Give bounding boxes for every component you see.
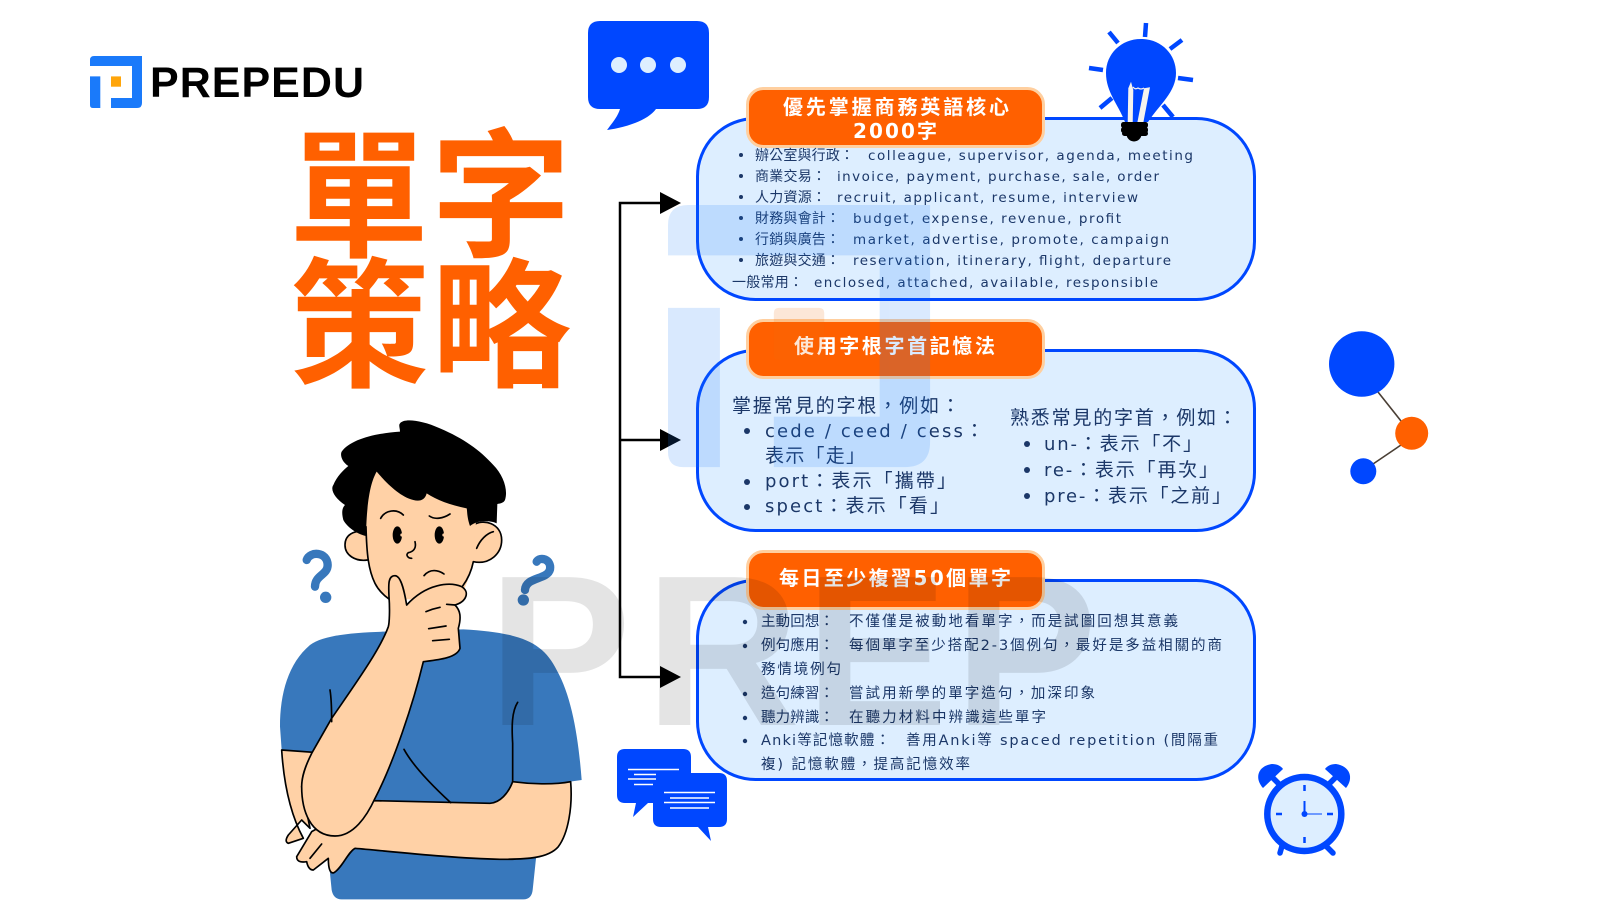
panel 3 heading — [748, 552, 1044, 608]
ears — [345, 531, 375, 560]
panel 1 list: 旅遊與交通： — [755, 250, 840, 270]
panel 3 list: 複) 記憶軟體，提高記憶效率 — [761, 756, 970, 773]
watermark: PREP: P — [488, 530, 631, 771]
panel 1 list: 辦公室與行政： — [755, 145, 854, 165]
panel 1 list — [732, 145, 1193, 292]
panel 1 list: 一般常用： — [732, 272, 803, 292]
watermark: PREP: R — [645, 530, 800, 771]
panel 1 list: 商業交易： — [755, 166, 826, 186]
panel 3 list: 善用Anki等 spaced repetition (間隔重 — [906, 731, 1218, 749]
panel 3 heading: 每日至少複習50個單字 — [779, 566, 1011, 590]
panel 3 background — [698, 580, 1254, 780]
panel 2 background — [698, 350, 1254, 530]
panel 1 list: invoice, payment, purchase, sale, order — [837, 169, 1159, 185]
title: 單字策略: 字 — [431, 85, 571, 287]
title: 單字策略: 略 — [431, 215, 571, 417]
panel 3 list — [743, 612, 1222, 773]
title: 單字策略: 策 — [289, 215, 429, 417]
panel 2: roots and prefixes — [698, 320, 1254, 530]
arrows: connector from title to panels — [620, 192, 681, 688]
logo: PREPEDU — [90, 56, 364, 108]
panel 1 list: 行銷與廣告： — [755, 229, 840, 249]
panel 1 list: 財務與會計： — [755, 208, 840, 228]
panel 2 left column: roots: 表示「走」 — [765, 445, 865, 467]
face — [366, 472, 477, 599]
title: 單字策略 — [289, 85, 571, 417]
panel 2 right column: prefixes: pre-：表示「之前」 — [1044, 485, 1231, 507]
panel 3 list: 聽力辨識： — [761, 709, 834, 726]
panel 3 list: 在聽力材料中辨識這些單字 — [849, 708, 1046, 726]
panel 2 left column: roots: spect：表示「看」 — [765, 495, 949, 517]
panel 1 list: colleague, supervisor, agenda, meeting — [868, 148, 1193, 164]
panel 2 left column: roots: 掌握常見的字根，例如： — [732, 395, 960, 417]
shirt — [280, 629, 582, 899]
question marks — [307, 554, 550, 590]
panel 3 list: Anki等記憶軟體： — [761, 731, 890, 749]
panel 3 list: 嘗試用新學的單字造句，加深印象 — [849, 684, 1095, 702]
icon: alarm clock — [1258, 764, 1350, 853]
icon: speech bubble with dots — [588, 21, 709, 130]
skin and line art — [282, 522, 571, 873]
panel 2 right column: prefixes: re-：表示「再次」 — [1044, 459, 1218, 481]
watermark: logo mark — [668, 205, 930, 467]
illustration: thinking man — [280, 420, 582, 899]
icon: chat bubbles — [617, 749, 727, 841]
panel 3 list: 造句練習： — [761, 685, 834, 702]
jaw outline — [366, 527, 473, 599]
panel 3 list: 例句應用： — [761, 636, 834, 654]
panel 2 left column: roots — [732, 395, 984, 517]
panel 2 right column: prefixes — [1010, 407, 1237, 507]
panel 3 list: 務情境例句 — [761, 660, 841, 678]
panel 1 list: budget, expense, revenue, profit — [853, 211, 1121, 227]
facial features — [310, 511, 518, 858]
panel 2 left column: roots: port：表示「攜帶」 — [765, 470, 956, 492]
panel 2 left column: roots: cede / ceed / cess： — [765, 420, 984, 442]
watermark: PREP — [488, 530, 1097, 771]
panel 1 heading: 優先掌握商務英語核心 — [783, 95, 1009, 119]
panel 1 list: enclosed, attached, available, responsible — [814, 275, 1158, 291]
panel 1 list: market, advertise, promote, campaign — [853, 232, 1169, 248]
panel 1 list: 人力資源： — [755, 187, 826, 207]
panel 1 list: reservation, itinerary, flight, departure — [853, 253, 1171, 269]
panel 3 list: 每個單字至少搭配2-3個例句，最好是多益相關的商 — [849, 636, 1222, 654]
panel 1: core vocabulary — [698, 88, 1254, 300]
panel 2 heading: 使用字根字首記憶法 — [794, 334, 995, 358]
icon: network of dots — [1329, 331, 1428, 484]
panel 1 background — [698, 118, 1254, 300]
panel 3 list: 主動回想： — [761, 613, 834, 630]
icon: light bulb — [1089, 23, 1193, 142]
panel 1 list: recruit, applicant, resume, interview — [837, 190, 1138, 206]
logo icon — [90, 56, 142, 108]
forearm and hand — [302, 576, 466, 836]
panel 2 heading — [748, 320, 1044, 378]
hair — [332, 420, 506, 536]
panel 3: daily review — [698, 552, 1254, 780]
panel 1 heading — [748, 88, 1044, 146]
lower left arm — [282, 750, 313, 843]
panel 2 right column: prefixes: un-：表示「不」 — [1044, 433, 1202, 455]
watermark: PREP: P — [954, 530, 1097, 771]
watermark: PREP: E — [805, 530, 948, 771]
title: 單字策略: 單 — [289, 85, 429, 287]
logo wordmark: PREPEDU — [150, 59, 364, 107]
crossed arm — [297, 782, 571, 873]
panel 2 right column: prefixes: 熟悉常見的字首，例如： — [1010, 407, 1237, 429]
panel 3 list: 不僅僅是被動地看單字，而是試圖回想其意義 — [849, 612, 1178, 630]
panel 1 heading: 2000字 — [853, 119, 937, 143]
